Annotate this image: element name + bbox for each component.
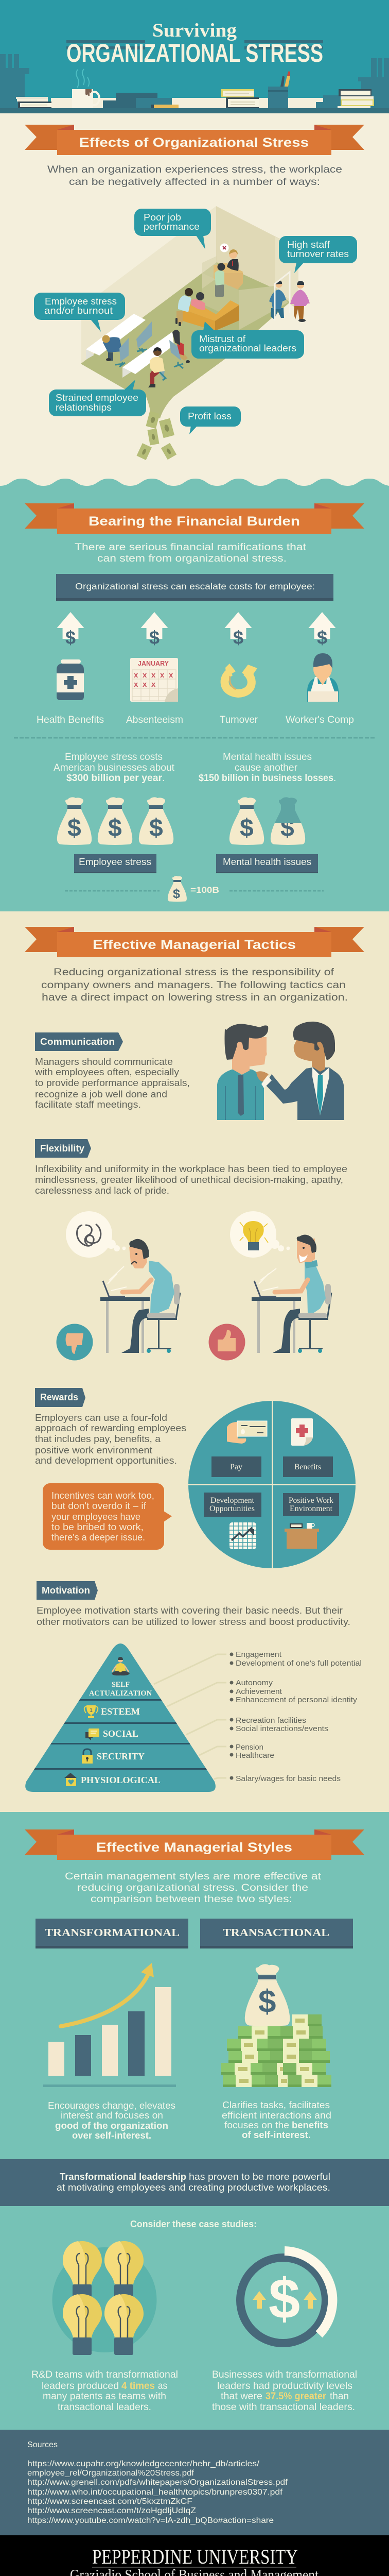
door frame bbox=[275, 272, 290, 320]
callout: employee stress bbox=[34, 293, 125, 332]
icon: calendar: x bbox=[134, 680, 138, 689]
text: rewards: positive work environment bbox=[35, 1445, 152, 1455]
intro text: effects bbox=[47, 164, 342, 188]
callout: incentives: Incentives can work too, bbox=[51, 1490, 154, 1501]
section heading: Effective Managerial Styles: Effective Managerial Styles bbox=[96, 1840, 292, 1855]
callout: strained relationships bbox=[49, 380, 146, 416]
two employees at desk bbox=[175, 288, 205, 326]
icon: money bag: $ bbox=[258, 1984, 276, 2020]
callout: high staff turnover: turnover rates bbox=[287, 249, 349, 259]
banner: transformational leadership: has proven to be more powerful bbox=[189, 2171, 330, 2182]
connectors: pyramid to lists bbox=[154, 1654, 226, 1779]
text: communication bbox=[34, 1057, 190, 1110]
text: transformational description: interest and focuses on bbox=[61, 2110, 163, 2121]
text: flexibility: carelessness and lack of pride. bbox=[35, 1185, 169, 1196]
icon: calendar: x bbox=[151, 671, 156, 680]
icon: trophy: 1 bbox=[90, 1707, 93, 1714]
right white desk bbox=[122, 332, 174, 378]
stat text: employee stress cost: $300 billion per year bbox=[66, 773, 163, 784]
footer: Pepperdine logo bbox=[0, 2535, 389, 2576]
employee with crossed arms bbox=[148, 347, 166, 387]
intro text: styles: reducing organizational stress. Consider the bbox=[77, 1882, 308, 1893]
cost item: turnover bbox=[220, 612, 258, 725]
stat text: employee stress cost: . bbox=[162, 773, 165, 784]
panel: sources: employee_rel/Organizational%20Stress.pdf bbox=[27, 2469, 194, 2478]
icon: calendar: x bbox=[143, 680, 147, 689]
text: communication: facilitate staff meetings. bbox=[35, 1099, 141, 1110]
callout: incentives: to be bribed to work, bbox=[51, 1522, 144, 1532]
intro text: tactics: have a direct impact on lowering stress in an organization. bbox=[42, 992, 348, 1003]
back wall bbox=[216, 206, 298, 309]
money bags: employee stress: $ bbox=[67, 815, 81, 842]
callout: poor job performance: Poor job bbox=[144, 212, 181, 223]
text: case study R&D: many patents as teams with bbox=[43, 2391, 166, 2402]
icon: medicine bottle bbox=[57, 659, 84, 700]
intro text: financial: can stem from organizational stress. bbox=[97, 553, 287, 564]
callout: high staff turnover: High staff bbox=[287, 240, 330, 250]
cost item: absenteeism: $ bbox=[149, 627, 160, 648]
icon: four light bulbs bbox=[52, 2241, 156, 2355]
text: flexibility: mindlessness, greater likelihood of unethical decision-making, apathy, bbox=[35, 1175, 343, 1185]
icon: left book stack bbox=[16, 97, 51, 108]
text: transformational description: over self-interest. bbox=[72, 2130, 151, 2141]
empty chair bbox=[136, 321, 152, 354]
icon: calendar: x bbox=[151, 680, 156, 689]
list: esteem needs: Autonomy bbox=[236, 1679, 273, 1687]
banner: transformational leadership bbox=[0, 2159, 389, 2206]
text: case study R&D bbox=[31, 2369, 178, 2413]
list: social needs: Social interactions/events bbox=[236, 1725, 328, 1733]
money bags: employee stress: $ bbox=[149, 815, 163, 842]
list: esteem needs: Enhancement of personal identity bbox=[236, 1696, 358, 1704]
legend: one bag equals 100B: =100B bbox=[190, 885, 219, 895]
left white desk bbox=[86, 314, 146, 360]
icon: calendar: x bbox=[143, 671, 147, 680]
pyramid labels: ESTEEM bbox=[101, 1706, 140, 1717]
cost item: health benefits bbox=[37, 612, 104, 725]
chart: four-fold rewards circle bbox=[188, 1401, 356, 1568]
tag: communication: Communication bbox=[40, 1037, 115, 1047]
quadrant: development bbox=[204, 1493, 261, 1549]
money bags: employee stress bbox=[57, 797, 173, 845]
pyramid labels: ACTUALIZATION bbox=[89, 1689, 152, 1698]
tag: rewards bbox=[35, 1388, 85, 1407]
quadrant: benefits: Benefits bbox=[294, 1463, 321, 1471]
stat text: mental health cost bbox=[199, 752, 336, 784]
text: case study productivity: Businesses with transformational bbox=[212, 2369, 357, 2380]
title: Surviving bbox=[152, 20, 237, 41]
text: transactional description bbox=[222, 2099, 331, 2140]
text: flexibility: Inflexibility and uniformity in the workplace has been tied to employee bbox=[35, 1164, 347, 1174]
banner: transformational leadership: Transformational leadership bbox=[60, 2171, 186, 2182]
callout: poor job performance bbox=[134, 209, 211, 249]
cost item: turnover: $ bbox=[233, 627, 243, 648]
pyramid labels: SELF bbox=[112, 1681, 130, 1689]
cost item: absenteeism: Absenteeism bbox=[126, 715, 183, 725]
quadrant: positive work environment: Positive Work bbox=[289, 1496, 333, 1505]
stat text: mental health cost: . bbox=[333, 773, 336, 784]
text: case study R&D: as bbox=[158, 2381, 167, 2392]
text: rewards: and development opportunities. bbox=[35, 1455, 177, 1466]
illustration: isometric office bbox=[81, 206, 310, 460]
callout: strained relationships: Strained employee bbox=[56, 393, 138, 403]
intro text: styles bbox=[65, 1871, 322, 1905]
pyramid labels: SOCIAL bbox=[103, 1728, 138, 1739]
list: security needs: Healthcare bbox=[236, 1752, 274, 1760]
text: case study R&D: leaders produced bbox=[42, 2381, 119, 2392]
heading: transformational: TRANSFORMATIONAL bbox=[45, 1926, 180, 1939]
callout: strained relationships: relationships bbox=[56, 402, 112, 413]
heading: transactional: TRANSACTIONAL bbox=[223, 1926, 329, 1939]
left man bbox=[217, 1024, 268, 1120]
section heading: Effects of Organizational Stress: Effects of Organizational Stress bbox=[79, 135, 309, 150]
section heading: Effective Managerial Styles bbox=[25, 1829, 364, 1860]
callout: incentives: your employees have bbox=[51, 1512, 140, 1522]
stat text: mental health cost: cause another bbox=[235, 762, 298, 773]
icon: calendar: x bbox=[169, 671, 173, 680]
icon: right book stack bbox=[338, 89, 374, 108]
tag: motivation bbox=[37, 1581, 98, 1600]
text: case study R&D: 4 times bbox=[121, 2381, 155, 2392]
cost item: turnover: Turnover bbox=[220, 715, 258, 725]
text: case studies heading: Consider these case studies: bbox=[130, 2219, 257, 2229]
text: motivation: other motivators can be utilized to lower stress and boost productivity. bbox=[37, 1617, 350, 1627]
money bags: mental health: $ bbox=[240, 815, 254, 842]
text: communication: recognize a job well done and bbox=[35, 1089, 167, 1099]
list: esteem needs: Achievement bbox=[236, 1688, 282, 1696]
chart: pyramid of needs bbox=[21, 1643, 226, 1792]
text: case study productivity: 37.5% greater bbox=[266, 2391, 327, 2402]
list: security needs: Pension bbox=[236, 1743, 263, 1752]
stat text: employee stress cost: American businesses about bbox=[54, 762, 175, 773]
intro text: financial bbox=[75, 541, 307, 564]
list: self actualization needs: Engagement bbox=[236, 1651, 281, 1659]
tag: motivation: Motivation bbox=[42, 1585, 90, 1596]
illustration: happy man at laptop bbox=[230, 1211, 331, 1353]
text: rewards: Employers can use a four-fold bbox=[35, 1413, 167, 1423]
manager desk bbox=[214, 263, 243, 290]
icon: money bag bbox=[245, 1964, 290, 2026]
text: motivation bbox=[37, 1605, 350, 1627]
callout: employee stress: and/or burnout bbox=[44, 306, 113, 316]
pyramid labels bbox=[81, 1681, 161, 1785]
cost item: worker's comp bbox=[286, 612, 354, 725]
icon: pen cup bbox=[268, 71, 290, 108]
panel: sources: Sources bbox=[27, 2441, 58, 2449]
icon: meditating figure bbox=[112, 1657, 130, 1675]
icon: productivity ring with dollar bbox=[240, 2251, 332, 2343]
list: social needs bbox=[229, 1717, 328, 1733]
thought bubble: light bulb bbox=[230, 1211, 290, 1258]
tag: flexibility bbox=[35, 1139, 91, 1158]
text: case study productivity: leaders had productivity levels bbox=[217, 2381, 352, 2392]
intro text: tactics: company owners and managers. The following tactics can bbox=[41, 979, 346, 991]
thought bubble: scribble bbox=[66, 1211, 126, 1258]
label: mental health issues: Mental health issues bbox=[223, 857, 311, 867]
callout: incentives bbox=[43, 1483, 172, 1550]
panel: financial burden background bbox=[0, 479, 389, 911]
icon: worker bbox=[307, 653, 339, 702]
building silhouette right bbox=[358, 58, 389, 108]
manager figure bbox=[220, 243, 239, 271]
tag: rewards: Rewards bbox=[40, 1392, 78, 1402]
icon: center book stack bbox=[221, 89, 259, 108]
text: rewards: approach of rewarding employees bbox=[35, 1423, 186, 1433]
icon: thumbs down bbox=[57, 1324, 93, 1360]
text: transformational description: Encourages change, elevates bbox=[48, 2100, 175, 2111]
text: case study productivity bbox=[212, 2369, 357, 2413]
illustration: two men talking bbox=[217, 1022, 344, 1120]
departing employee blue bbox=[269, 280, 286, 319]
heading: transformational bbox=[36, 1919, 188, 1948]
panel: sources: http://www.screencast.com/t/5kxztmZkCF bbox=[27, 2497, 192, 2506]
text: transactional description: focuses on the bbox=[224, 2120, 289, 2130]
intro text: styles: comparison between these two styles: bbox=[91, 1893, 292, 1905]
customer figure bbox=[215, 263, 225, 297]
right man bbox=[256, 1022, 344, 1120]
panel: sources: https://www.cupahr.org/knowledgecenter/hehr_db/articles/ bbox=[27, 2460, 260, 2468]
panel: sources: http://www.screencast.com/t/zoHgdIjUdIqZ bbox=[27, 2506, 196, 2515]
list: social needs: Recreation facilities bbox=[236, 1717, 306, 1725]
cost item: health benefits: $ bbox=[65, 627, 76, 648]
illustration: stressed man at laptop bbox=[66, 1211, 180, 1353]
banner: escalating costs: Organizational stress can escalate costs for employee: bbox=[75, 581, 315, 591]
text: transactional description: Clarifies tasks, facilitates bbox=[222, 2099, 330, 2110]
text: flexibility bbox=[35, 1164, 347, 1196]
departing employee pink bbox=[290, 281, 310, 322]
callout: profit loss: Profit loss bbox=[188, 411, 232, 421]
money bags: mental health: $ bbox=[280, 815, 294, 842]
panel: managerial tactics background bbox=[0, 911, 389, 1812]
building silhouette left bbox=[0, 54, 29, 108]
callout: high staff turnover bbox=[279, 236, 357, 273]
stat text: employee stress cost: Employee stress costs bbox=[65, 752, 163, 762]
text: motivation: Employee motivation starts with covering their basic needs. But their bbox=[37, 1605, 343, 1616]
icon: productivity ring with dollar: $ bbox=[269, 2267, 300, 2331]
text: communication: to provide performance appraisals, bbox=[35, 1078, 190, 1088]
callout: mistrust bbox=[191, 321, 304, 359]
icon: coffee mug bbox=[72, 69, 99, 108]
left wall bbox=[81, 206, 216, 364]
bar chart: growth bbox=[43, 1963, 176, 2087]
section heading: Bearing the Financial Burden bbox=[25, 503, 364, 534]
callout: mistrust: organizational leaders bbox=[199, 343, 296, 353]
label: employee stress bbox=[74, 854, 156, 873]
quadrant: benefits bbox=[283, 1418, 333, 1477]
pyramid labels: PHYSIOLOGICAL bbox=[81, 1775, 161, 1785]
stat text: mental health cost: Mental health issues bbox=[223, 752, 312, 762]
slumped employee bbox=[102, 335, 129, 367]
text: case study productivity: those with transactional leaders. bbox=[212, 2402, 355, 2413]
header banner bbox=[0, 0, 389, 113]
floor bbox=[81, 262, 290, 418]
icon: calendar: x bbox=[160, 671, 165, 680]
stat text: mental health cost: $150 billion in business losses bbox=[199, 773, 333, 784]
text: transactional description: benefits bbox=[292, 2120, 328, 2130]
text: transactional description: efficient interactions and bbox=[222, 2110, 331, 2121]
quadrant: positive work environment: Environment bbox=[290, 1504, 333, 1513]
text: transactional description: of self-interest. bbox=[242, 2129, 311, 2140]
label: employee stress: Employee stress bbox=[79, 857, 151, 867]
partition bbox=[202, 273, 239, 321]
panel: managerial styles background bbox=[0, 1812, 389, 2430]
title rules bbox=[66, 40, 323, 49]
icon: trophy bbox=[84, 1705, 98, 1718]
text: case study productivity: than bbox=[330, 2391, 349, 2402]
legend: one bag equals 100B: $ bbox=[173, 887, 180, 901]
text: rewards: that includes pay, benefits, a bbox=[35, 1434, 161, 1444]
icon: thumbs up bbox=[209, 1324, 245, 1360]
quadrant: development: Development bbox=[210, 1496, 255, 1505]
quadrant: development: Opportunities bbox=[209, 1504, 255, 1513]
desk papers and blocks bbox=[51, 93, 341, 108]
L desk bbox=[183, 300, 239, 331]
callout: poor job performance: performance bbox=[144, 222, 200, 232]
text: case study productivity: that were bbox=[221, 2391, 262, 2402]
falling money bbox=[136, 411, 176, 460]
tag: flexibility: Flexibility bbox=[40, 1143, 84, 1154]
text: communication: with employees often, especially bbox=[34, 1067, 179, 1077]
section heading: Effects of Organizational Stress bbox=[25, 125, 364, 155]
icon: house bbox=[64, 1773, 77, 1786]
list: self actualization needs bbox=[229, 1651, 362, 1668]
icon: calendar: JANUARY bbox=[138, 659, 169, 667]
list: esteem needs bbox=[229, 1679, 358, 1704]
intro text: effects: can be negatively affected in a number of ways: bbox=[69, 176, 320, 188]
panel: sources: http://www.who.int/occupational_health/topics/brunpres0307.pdf bbox=[27, 2488, 283, 2497]
text: case study R&D: transactional leaders. bbox=[58, 2402, 151, 2413]
section heading: Bearing the Financial Burden: Bearing the Financial Burden bbox=[89, 514, 300, 529]
title bbox=[66, 20, 323, 67]
list: security needs bbox=[229, 1743, 274, 1760]
text: transformational description bbox=[48, 2100, 175, 2141]
intro text: styles: Certain management styles are more effective at bbox=[65, 1871, 322, 1882]
arrow: rising trend bbox=[61, 1963, 154, 2026]
cost item: health benefits: Health Benefits bbox=[37, 715, 104, 725]
list: physiological needs: Salary/wages for basic needs bbox=[236, 1775, 341, 1783]
illustration: money stack and bag bbox=[221, 1964, 331, 2087]
callout: profit loss bbox=[180, 406, 241, 434]
legend: one bag equals 100B bbox=[65, 876, 324, 902]
cost item: worker's comp: $ bbox=[317, 627, 327, 648]
icon: calendar: x bbox=[134, 671, 138, 680]
intro text: tactics: Reducing organizational stress is the responsibility of bbox=[54, 967, 334, 978]
callout: mistrust: Mistrust of bbox=[199, 334, 246, 344]
banner: transformational leadership: at motivating employees and creating productive workplaces. bbox=[57, 2182, 330, 2193]
icon: calendar bbox=[130, 658, 178, 702]
icon: chat bubbles bbox=[85, 1728, 99, 1740]
icon: padlock bbox=[82, 1749, 93, 1764]
quadrant: positive work environment bbox=[283, 1493, 339, 1549]
stat text: employee stress cost bbox=[54, 752, 175, 784]
cost item: worker's comp: Worker's Comp bbox=[286, 715, 354, 725]
banner: escalating costs bbox=[56, 574, 333, 601]
callout: employee stress: Employee stress bbox=[45, 296, 117, 307]
text: communication: Managers should communicate bbox=[35, 1057, 173, 1067]
callout: incentives: but don't overdo it – if bbox=[51, 1501, 147, 1511]
panel: sources: https://www.youtube.com/watch?v=lA-zdh_bQBo#action=share bbox=[27, 2516, 274, 2525]
employee with long hair bbox=[169, 330, 190, 368]
section heading: Effective Managerial Tactics: Effective Managerial Tactics bbox=[93, 938, 296, 952]
pyramid labels: SECURITY bbox=[97, 1751, 145, 1761]
cost item: absenteeism bbox=[126, 612, 183, 725]
intro text: tactics bbox=[41, 967, 348, 1003]
icon: turnover arrow bbox=[225, 664, 257, 693]
text: rewards bbox=[35, 1413, 186, 1466]
money bags: mental health bbox=[229, 797, 305, 845]
quadrant: pay: Pay bbox=[230, 1463, 242, 1471]
money bags: employee stress: $ bbox=[108, 815, 122, 842]
footer: Pepperdine logo: PEPPERDINE UNIVERSITY bbox=[92, 2545, 298, 2568]
tag: communication bbox=[35, 1032, 123, 1051]
panel: sources: http://www.grenell.com/pdfs/whitepapers/OrganizationalStress.pdf bbox=[27, 2478, 288, 2487]
label: mental health issues bbox=[216, 854, 318, 873]
panel: sources bbox=[0, 2430, 389, 2535]
heading: transactional bbox=[200, 1919, 353, 1948]
callout: incentives: there's a deeper issue. bbox=[51, 1532, 145, 1543]
text: case study R&D: R&D teams with transformational bbox=[31, 2369, 178, 2380]
text: transformational description: good of the organization bbox=[55, 2120, 168, 2131]
list: self actualization needs: Development of one's full potential bbox=[236, 1659, 362, 1668]
section heading: Effective Managerial Tactics bbox=[25, 927, 364, 957]
icon: yellow book bbox=[151, 105, 179, 108]
intro text: effects: When an organization experiences stress, the workplace bbox=[47, 164, 342, 175]
quadrant: pay bbox=[211, 1421, 267, 1477]
intro text: financial: There are serious financial ramifications that bbox=[75, 541, 307, 553]
